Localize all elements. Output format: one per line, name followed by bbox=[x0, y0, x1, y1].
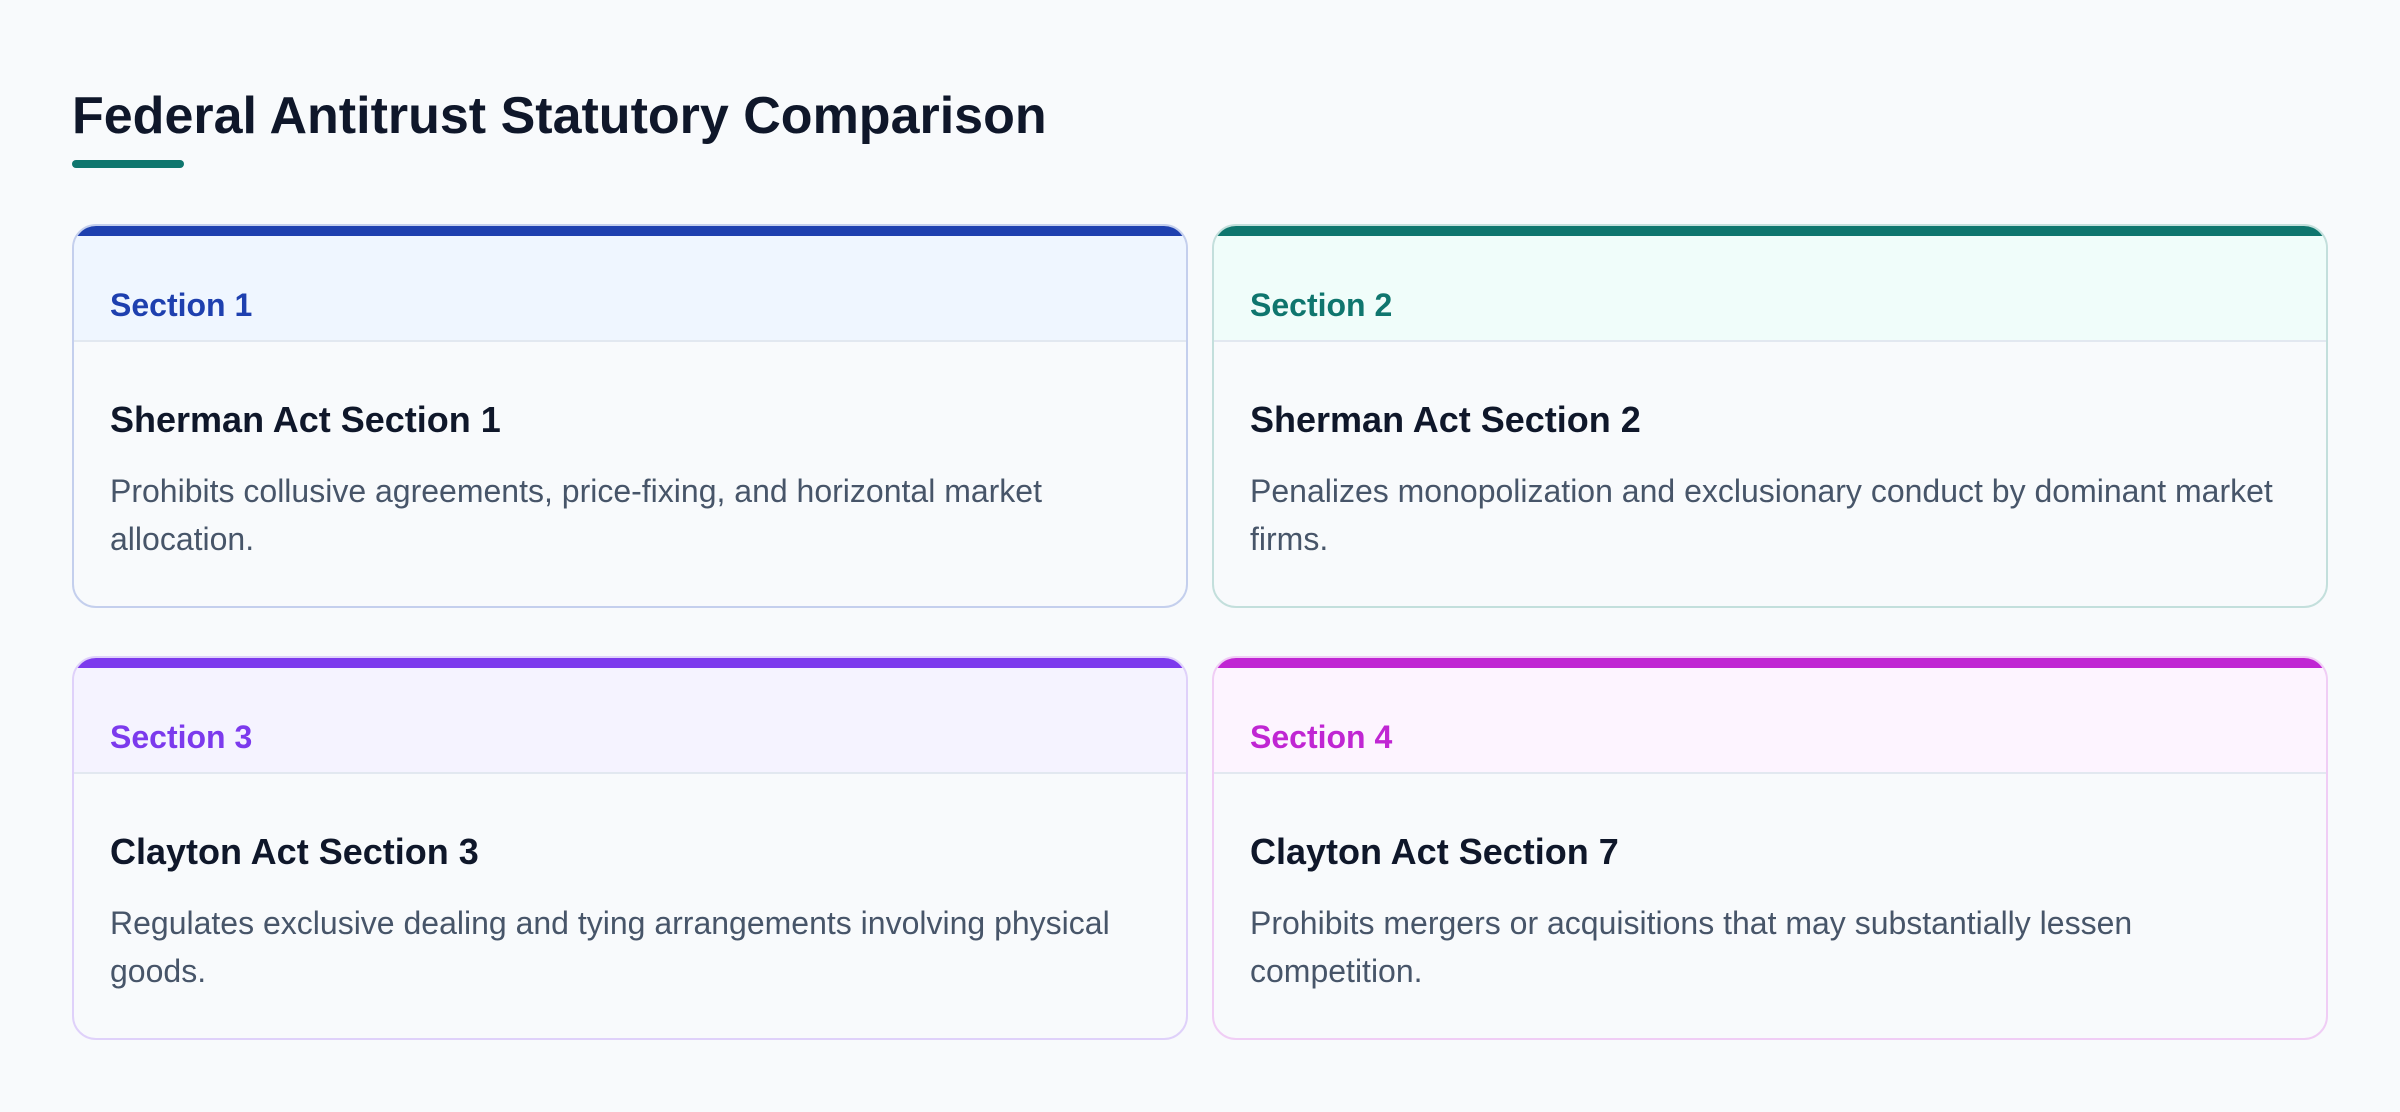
panel header: Section 1 bbox=[74, 226, 1186, 342]
card description bbox=[1250, 473, 2273, 557]
card description: Regulates exclusive dealing and tying arrangements involving physical bbox=[110, 905, 1110, 941]
card description: Prohibits collusive agreements, price-fixing, and horizontal market bbox=[110, 473, 1042, 509]
card heading: Clayton Act Section 7 bbox=[1250, 831, 1619, 872]
panel header: Section 2 bbox=[1214, 226, 2326, 342]
card description: firms. bbox=[1250, 521, 1328, 557]
card heading: Sherman Act Section 1 bbox=[110, 399, 501, 440]
section label: Section 2 bbox=[1250, 287, 1392, 323]
card heading: Sherman Act Section 2 bbox=[1250, 399, 1641, 440]
title underline bbox=[72, 160, 184, 168]
panel header: Section 4 bbox=[1214, 658, 2326, 774]
card description: Prohibits mergers or acquisitions that may substantially lessen bbox=[1250, 905, 2132, 941]
card heading: Clayton Act Section 3 bbox=[110, 831, 479, 872]
panel header: Section 3 bbox=[74, 658, 1186, 774]
section label: Section 4 bbox=[1250, 719, 1392, 755]
card description: Penalizes monopolization and exclusionary conduct by dominant market bbox=[1250, 473, 2273, 509]
section label: Section 1 bbox=[110, 287, 252, 323]
card description: allocation. bbox=[110, 521, 254, 557]
panel: Sherman Act Section 1 bbox=[72, 224, 1188, 608]
card description: competition. bbox=[1250, 953, 1423, 989]
card description bbox=[110, 905, 1110, 989]
panel: Clayton Act Section 3 bbox=[72, 656, 1188, 1040]
panel: Sherman Act Section 2 bbox=[1212, 224, 2328, 608]
section label: Section 3 bbox=[110, 719, 252, 755]
card description bbox=[1250, 905, 2132, 989]
panel: Clayton Act Section 7 bbox=[1212, 656, 2328, 1040]
card description bbox=[110, 473, 1042, 557]
title: Federal Antitrust Statutory Comparison bbox=[72, 87, 1047, 145]
card description: goods. bbox=[110, 953, 206, 989]
